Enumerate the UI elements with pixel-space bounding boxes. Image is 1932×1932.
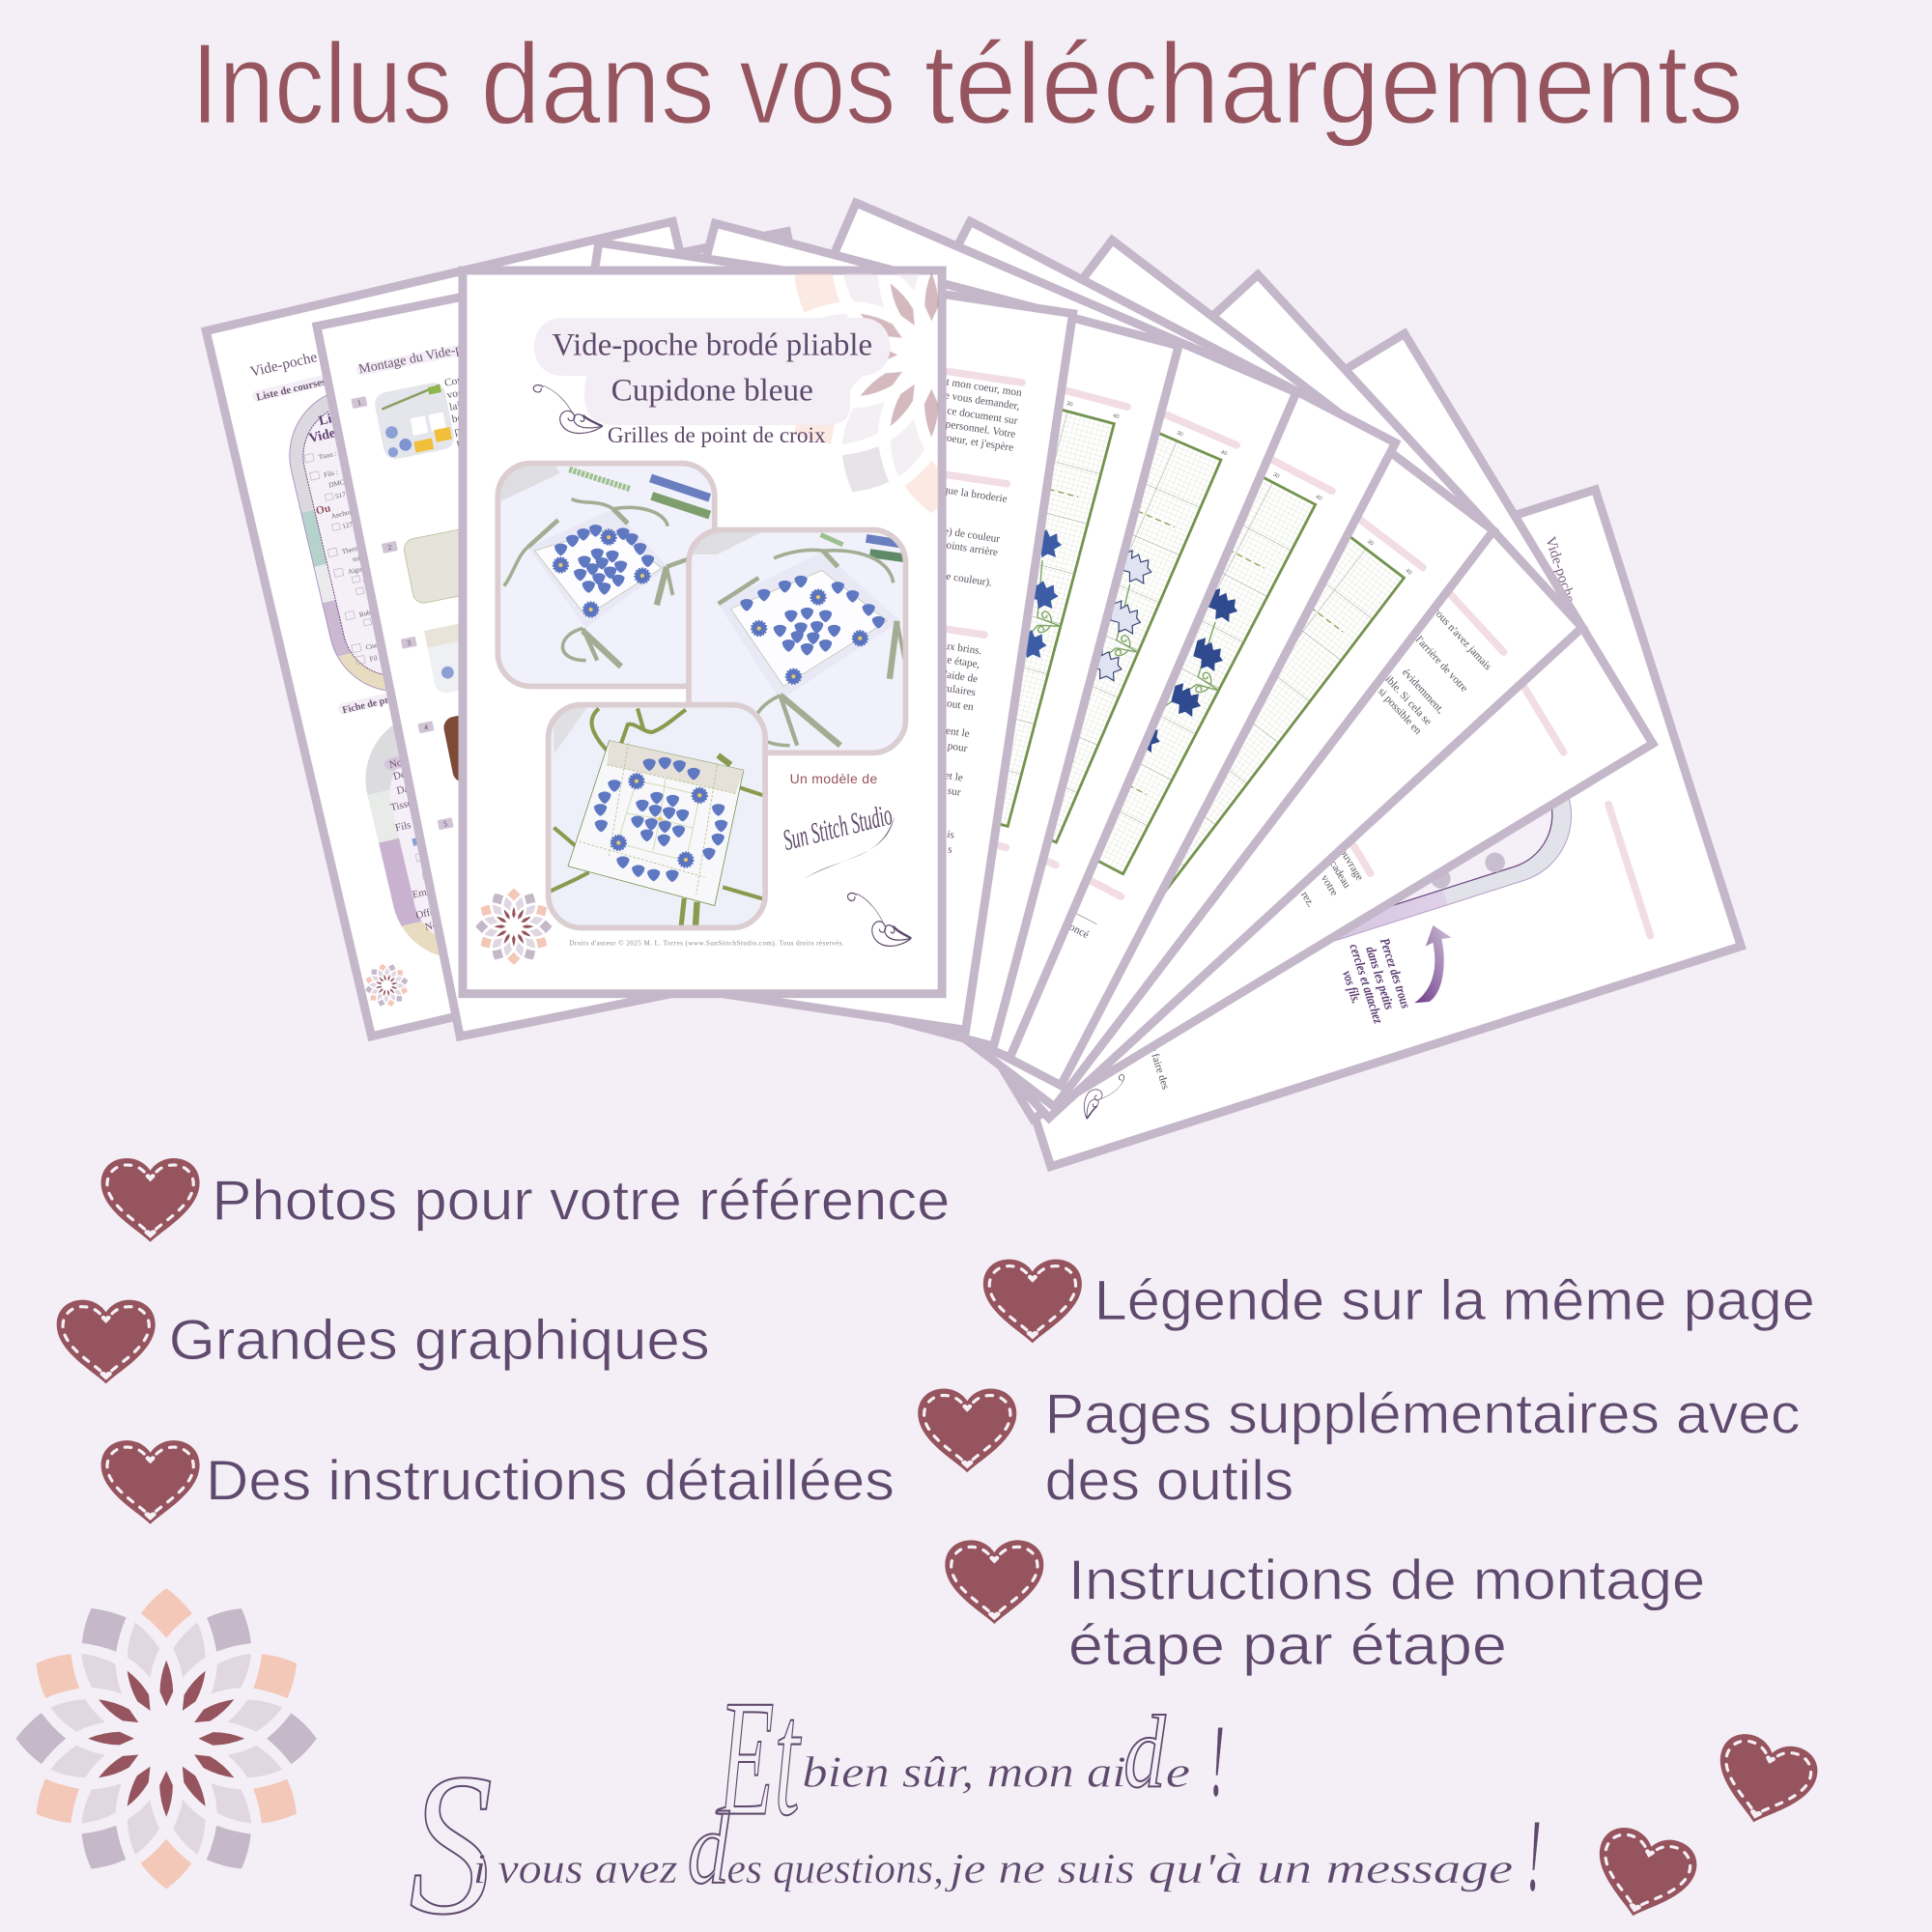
page: instructions text: que la broderie <box>942 484 1008 505</box>
page: shopping list: C <box>373 618 380 627</box>
feature: charts: Grandes graphiques <box>169 1309 710 1372</box>
page: assembly steps: laissez <box>448 396 479 413</box>
cover title: Grilles de point de croix <box>608 423 826 448</box>
page: shopping list: DMC : <box>328 477 349 490</box>
page: assembly steps: Comme <box>443 371 479 389</box>
page: shopping list: 127 <box>342 521 354 530</box>
page: instructions text: et le <box>944 770 964 784</box>
page: far right mounting page: dans les petits <box>1362 945 1397 1012</box>
page: shopping list: Notes <box>424 917 450 933</box>
page: instructions text: deux brins. <box>933 639 982 657</box>
page: shopping list: A <box>361 575 369 583</box>
script message line 2: d <box>688 1792 729 1906</box>
script message line 1: e <box>1166 1747 1190 1796</box>
icon: mandala small <box>475 889 552 965</box>
page: shopping list: Ou <box>315 502 332 517</box>
page: instructions text: coeur, et j'espère <box>941 432 1014 454</box>
feature: legend: Légende sur la même page <box>1094 1269 1815 1332</box>
page: back of work advice: évidemment, <box>1400 667 1446 716</box>
step photo 4 <box>441 692 588 784</box>
page: chart 3: 30 <box>1272 472 1280 480</box>
step photo 3 <box>424 604 570 695</box>
page: chart 4: 40 <box>1405 568 1412 577</box>
page: chart 1: 40 <box>1112 413 1120 420</box>
fanned document pages <box>206 197 1741 1167</box>
cover title <box>552 327 872 448</box>
page: instructions text: ce document sur <box>947 405 1018 427</box>
page: shopping list <box>201 216 684 1041</box>
page: shopping list: Ruban <box>358 608 378 619</box>
feature: extra pages <box>918 1382 1801 1512</box>
designer credit: Un modèle de <box>790 771 877 786</box>
page: tools page 59 degrees: ouvrage <box>1337 847 1365 883</box>
page: shopping list: Début <box>392 765 420 782</box>
page: shopping list: Nom <box>388 754 412 771</box>
page: back of work advice: l'arrière de votre <box>1413 634 1470 695</box>
icon: swirl top <box>533 385 603 434</box>
page: instructions text: cette étape, <box>930 652 980 670</box>
page: instructions text: personnel. Votre <box>945 418 1016 440</box>
step photo 2 <box>402 512 560 605</box>
page: back of work advice: possible. Si cela se <box>1370 660 1434 727</box>
cover title pill <box>534 318 891 425</box>
page: assembly steps: Montage du Vide-poche <box>357 336 489 378</box>
page: shopping list: Ciseaux <box>365 639 388 651</box>
script message line 1 <box>717 1667 1225 1851</box>
page: back of work advice <box>724 274 1582 1118</box>
copyright line: Droits d'auteur © 2025 M. L. Torres (www.SunStitchStudio.com). Tous droits réservés. <box>569 939 844 947</box>
page: assembly steps: 1 <box>356 398 362 407</box>
page: tools page 59 degrees: votre <box>1319 873 1340 898</box>
page: chart 1: 30 <box>1065 401 1073 408</box>
icon: faded mandala on cover <box>794 273 939 513</box>
page: shopping list: 517 <box>334 491 347 500</box>
script message line 2: i vous avez <box>473 1844 678 1892</box>
feature: assembly: étape par étape <box>1068 1614 1507 1677</box>
page: chart 2: 40 <box>1220 449 1228 457</box>
script message line 1: bien sûr, mon ai <box>802 1747 1126 1796</box>
page: shopping list: Aiguilles <box>347 562 374 576</box>
page: chart 1 <box>530 223 1179 1046</box>
text: ! <box>1526 1800 1542 1914</box>
page: far right mounting page: pour faire des <box>1142 1031 1171 1091</box>
page: assembly steps: the <box>456 436 471 449</box>
page: back of work advice: si possible en <box>1376 686 1424 737</box>
icon: large mandala <box>16 1588 317 1889</box>
page: shopping list: A <box>366 586 373 596</box>
feature: legend <box>983 1260 1815 1343</box>
title: Inclus <box>191 21 452 149</box>
page: far right mounting page: Vide-poche <box>1542 535 1578 605</box>
page: chart 4: 30 <box>1366 539 1375 548</box>
page: instructions text <box>492 242 1073 1030</box>
script message line 2: je ne suis <box>945 1844 1135 1892</box>
designer credit: Sun Stitch Studio <box>780 798 895 857</box>
feature: assembly <box>945 1540 1705 1677</box>
page: instructions text: que couleur). <box>934 569 993 589</box>
script message line 2 <box>409 1731 1542 1932</box>
page: shopping list: milieu <box>352 552 371 563</box>
page: chart 3: 40 <box>1315 495 1322 502</box>
page: far right mounting page <box>1033 484 1747 1173</box>
page: tools page 59 degrees <box>784 333 1653 1119</box>
page: shopping list: Liste de courses <box>255 376 327 404</box>
page: shopping list: Offert <box>414 904 442 922</box>
page: instructions text: sur <box>947 785 962 799</box>
title: vos <box>739 21 895 149</box>
feature: instructions <box>101 1440 895 1524</box>
page: chart 4 <box>673 241 1493 1107</box>
page: instructions text: is <box>947 829 955 841</box>
page: assembly steps: 5 <box>442 819 448 829</box>
feature: extra pages: des outils <box>1045 1449 1293 1512</box>
page: far right mounting page: vos fils. <box>1339 969 1364 1006</box>
feature: photos <box>101 1158 950 1242</box>
page: shopping list: Fil à <box>369 653 384 664</box>
page: instructions text: de vous demander, <box>939 389 1021 412</box>
feature: assembly: Instructions de montage <box>1068 1549 1705 1612</box>
page: shopping list: Tissu : <box>318 449 337 462</box>
page: assembly steps: 3 <box>407 638 412 647</box>
page: far right mounting page: Percez des trous <box>1377 936 1413 1010</box>
page: assembly steps: pièce <box>453 422 478 438</box>
page: chart 1: k <box>983 879 992 892</box>
page: shopping list: Liste <box>317 408 349 429</box>
page: instructions text: pour <box>947 740 968 754</box>
script message line 1: Et <box>717 1667 802 1851</box>
page: shopping list: Anchor : <box>330 507 355 521</box>
page: chart 2: 30 <box>1176 431 1183 439</box>
icon: decorative heart lower <box>1585 1822 1702 1928</box>
icon: swirl on far right page <box>1082 1069 1124 1124</box>
page: shopping list: Vide-poche brodé <box>248 340 355 381</box>
page: assembly steps: 2 <box>387 543 392 552</box>
page: shopping list: Emp <box>412 885 433 901</box>
photo: tray angled left <box>497 464 715 686</box>
page: instructions text: points arrière <box>940 539 999 558</box>
page: instructions text: ment le <box>937 724 970 740</box>
page: instructions text: De tout mon coeur, mon <box>917 372 1023 399</box>
icon: purple curved arrow <box>1414 925 1452 1003</box>
page: shopping list: Fiche de projet <box>341 692 406 716</box>
icon: decorative heart upper <box>1706 1728 1823 1834</box>
page: far right mounting page: cercles et attachez <box>1346 942 1386 1026</box>
feature: charts <box>57 1300 710 1383</box>
page: instructions text: s <box>947 843 953 856</box>
script message line 2: qu'à un message <box>1149 1844 1513 1892</box>
step photo 1 <box>373 381 456 461</box>
page: instructions text: circulaires <box>930 680 977 698</box>
page: cover <box>458 267 947 999</box>
page: shopping list: Tissu <box>389 797 414 813</box>
page: tools page 59 degrees: rez. <box>1298 890 1317 909</box>
page: back of work advice: vous n'avez jamais <box>1430 605 1493 672</box>
page: chart 2 <box>570 203 1296 1058</box>
text: ! <box>1210 1704 1225 1818</box>
page: assembly steps: bon <box>451 411 469 425</box>
page: shopping list: Fils : <box>324 469 338 479</box>
page: shopping list: Thermocollant <box>341 539 383 555</box>
title <box>191 21 1744 149</box>
page: instructions text: tout en <box>943 697 975 713</box>
page: instructions text: l'aide de <box>941 668 979 685</box>
page: instructions text: (e) de couleur <box>939 525 1001 545</box>
icon: swirl bottom <box>847 893 911 946</box>
feature: photos: Photos pour votre référence <box>212 1170 950 1233</box>
designer credit <box>780 771 895 878</box>
title: dans <box>480 21 715 149</box>
page: assembly steps: 4 <box>423 723 429 732</box>
script message line 2: es questions, <box>727 1844 944 1892</box>
photo: tray flat <box>549 705 765 927</box>
title: téléchargements <box>924 21 1744 149</box>
page: chart 3 <box>636 221 1396 1086</box>
feature: extra pages: Pages supplémentaires avec <box>1045 1382 1801 1445</box>
cover title: Vide-poche brodé pliable <box>552 327 872 362</box>
page: tools page 59 degrees: cadeau <box>1327 859 1352 891</box>
script message line 1: d <box>1123 1695 1166 1809</box>
page: shopping list: Vide-poche <box>307 416 374 446</box>
feature: instructions: Des instructions détaillées <box>206 1449 895 1512</box>
photo: tray angled right <box>689 529 906 753</box>
page: shopping list: Fils : <box>394 818 417 834</box>
page: shopping list: Date <box>395 781 417 797</box>
page: assembly steps <box>317 232 930 1037</box>
page: assembly steps: vos pièces, <box>446 381 495 401</box>
page: chart 3: es foncé <box>1054 914 1091 941</box>
cover title: Cupidone bleue <box>611 373 813 409</box>
